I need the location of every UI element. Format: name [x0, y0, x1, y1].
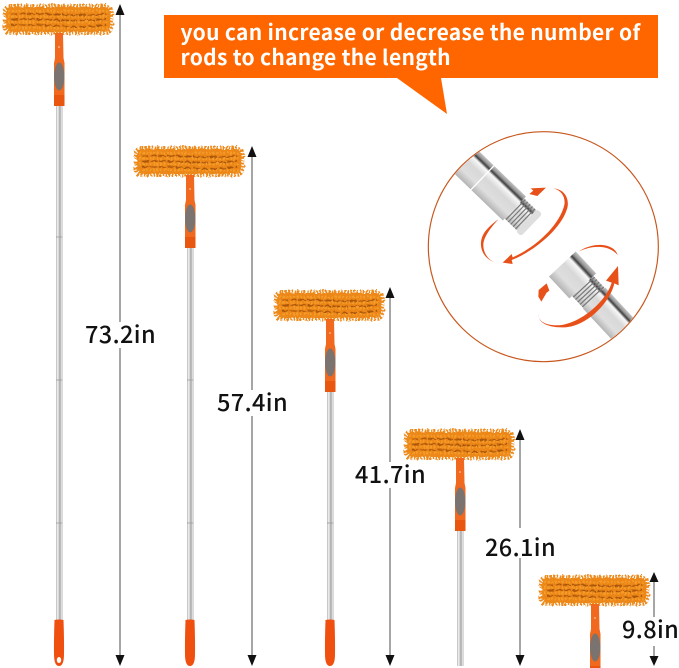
callout bubble [164, 15, 658, 114]
dimension 41.7in [355, 287, 426, 666]
pole 4 [457, 530, 464, 666]
pole 2 [187, 247, 194, 621]
dimension 73.2in [85, 4, 156, 666]
dimension 57.4in [217, 146, 288, 666]
label 9.8in: 9.8in [622, 611, 679, 645]
lower rod [549, 252, 633, 339]
pole 3 [327, 391, 334, 621]
rotation arrows upper [481, 188, 568, 264]
grip 3 [325, 620, 335, 666]
handle 1 [54, 33, 64, 106]
mop 4: 26.1in [406, 432, 512, 666]
grip 2 [185, 620, 195, 666]
mop 1: 73.2in [5, 6, 111, 666]
circle outline [428, 132, 658, 362]
label 57.4in: 57.4in [217, 384, 288, 418]
grip 1 [54, 620, 64, 666]
label 73.2in: 73.2in [85, 316, 156, 350]
head 2 [136, 148, 242, 174]
mop 3: 41.7in [276, 292, 382, 666]
detail circle: rods screwing together [428, 132, 658, 362]
head 4 [406, 432, 512, 458]
dimension 26.1in [485, 429, 556, 666]
handle 3 [325, 319, 336, 392]
rotation arrows lower [538, 245, 619, 327]
label 41.7in: 41.7in [355, 456, 426, 490]
mop 5: 9.8in [538, 574, 650, 668]
head 3 [276, 292, 382, 318]
handle 4 [455, 458, 466, 531]
head 1 [5, 6, 111, 32]
callout text: rods to change the length [180, 42, 451, 72]
dimension 9.8in [622, 572, 679, 666]
mop 2: 57.4in [136, 148, 242, 666]
handle 5 [590, 604, 600, 668]
upper rod [455, 152, 542, 235]
handle 2 [185, 175, 196, 248]
pole 1 [56, 105, 62, 621]
head 5 [541, 578, 647, 604]
label 26.1in: 26.1in [485, 529, 556, 563]
callout [164, 15, 658, 114]
callout text: you can increase or decrease the number of [180, 17, 641, 47]
